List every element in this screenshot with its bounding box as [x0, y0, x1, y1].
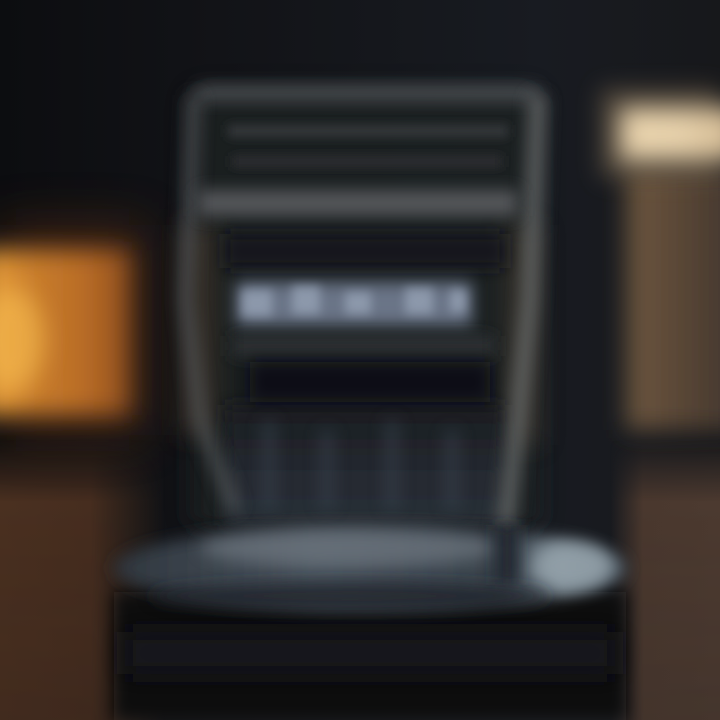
dark band — [225, 234, 505, 268]
upper reflected band — [228, 125, 508, 137]
glass right wall — [505, 95, 538, 530]
bright right part of disc — [532, 542, 612, 590]
disc top — [114, 526, 626, 610]
mid band — [232, 336, 494, 356]
upper reflected band 2 — [232, 156, 502, 167]
highlights in bright band — [242, 286, 466, 316]
glass bottom pale arc — [200, 530, 500, 566]
water — [225, 405, 505, 525]
glass body tint — [190, 90, 540, 530]
cream light, top right — [600, 88, 720, 178]
bright center band — [236, 282, 472, 326]
water line band — [198, 190, 518, 216]
table surface left — [0, 449, 153, 720]
dark base — [114, 592, 626, 720]
dark band low — [250, 362, 490, 402]
glass of water — [180, 86, 540, 530]
glass left wall — [186, 95, 235, 510]
water vertical streaks — [262, 420, 459, 510]
brown column, right — [626, 170, 720, 430]
brownish refraction — [180, 225, 216, 435]
dark mid-band on base — [125, 632, 615, 674]
orange glowing window, left — [0, 225, 145, 435]
disc lower edge shadow — [150, 582, 550, 610]
coaster disc — [114, 525, 626, 720]
glass bottom shadow — [495, 525, 519, 585]
table surface right — [610, 440, 720, 720]
glass rim — [195, 86, 540, 100]
